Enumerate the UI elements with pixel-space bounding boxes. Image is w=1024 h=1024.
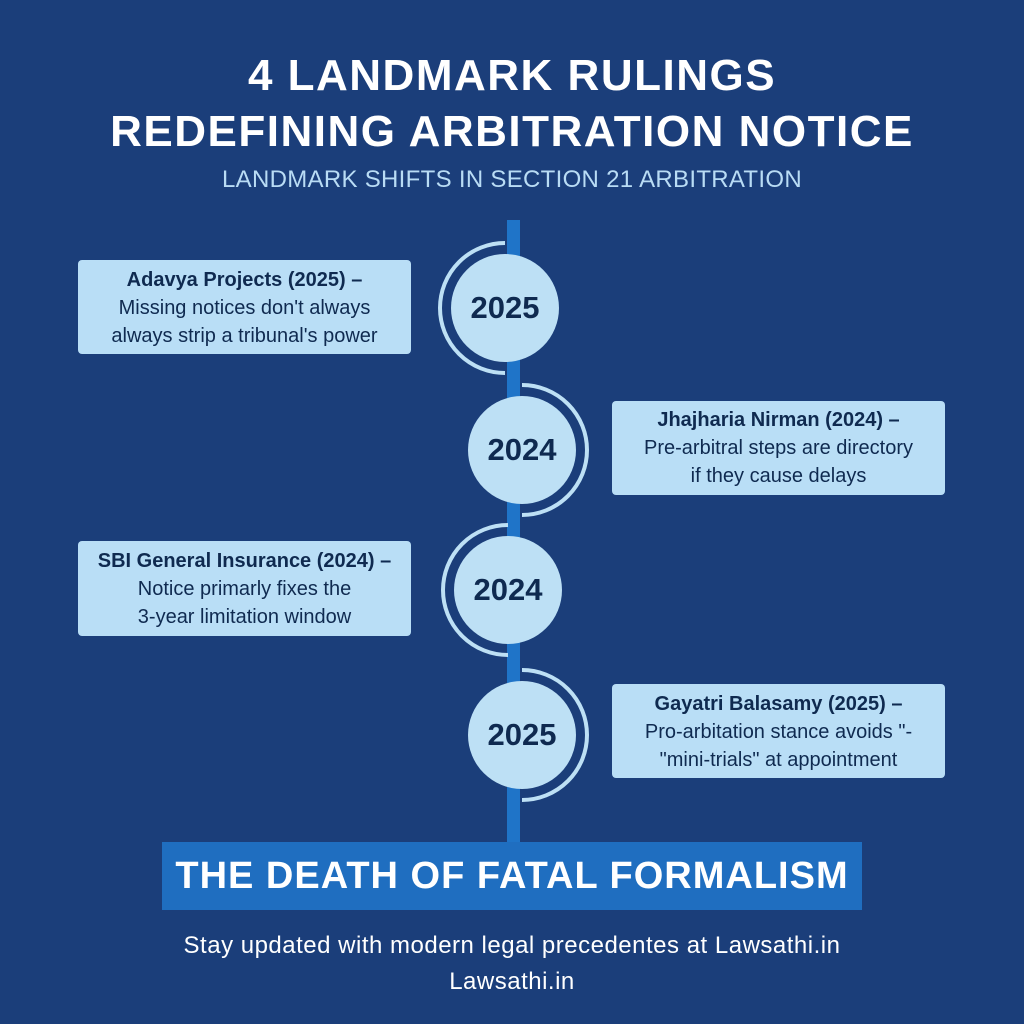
year circle 2 [468,396,576,504]
card: Adavya [78,260,411,354]
card: Adavya: Adavya Projects (2025) – [127,269,362,291]
card: Gayatri: "mini-trials" at appointment [660,749,897,771]
card: SBI: Notice primarly fixes the [138,578,351,600]
year circle 1 [451,254,559,362]
year circle 3 [454,536,562,644]
card: Adavya: always strip a tribunal's power [111,325,378,347]
title: 4 LANDMARK RULINGS [248,51,776,100]
card: Gayatri: Gayatri Balasamy (2025) – [655,693,902,715]
card: SBI [78,541,411,636]
card: Jhajharia: Jhajharia Nirman (2024) – [657,409,900,431]
card: SBI: SBI General Insurance (2024) – [98,550,391,572]
footer [184,932,840,995]
card: Adavya: Missing notices don't always [119,297,370,319]
title: REDEFINING ARBITRATION NOTICE [110,107,914,156]
year circle 4: 2025 [488,717,556,752]
card: Gayatri [612,684,945,778]
year circle 1: 2025 [471,290,539,325]
card: Jhajharia: if they cause delays [691,465,866,487]
footer: Stay updated with modern legal precedentes at Lawsathi.in [184,932,840,959]
year circle 3: 2024 [474,572,542,607]
timeline line [507,220,520,850]
year circle 2: 2024 [488,432,556,467]
card: Jhajharia [612,401,945,495]
title [110,51,914,156]
banner [162,842,862,910]
banner: THE DEATH OF FATAL FORMALISM [175,855,849,897]
card: Gayatri: Pro-arbitation stance avoids "- [645,721,912,743]
year circle 4 [468,681,576,789]
card: SBI: 3-year limitation window [138,606,351,628]
subtitle: LANDMARK SHIFTS IN SECTION 21 ARBITRATION [222,166,802,193]
card: Jhajharia: Pre-arbitral steps are directory [644,437,913,459]
footer: Lawsathi.in [449,968,575,995]
